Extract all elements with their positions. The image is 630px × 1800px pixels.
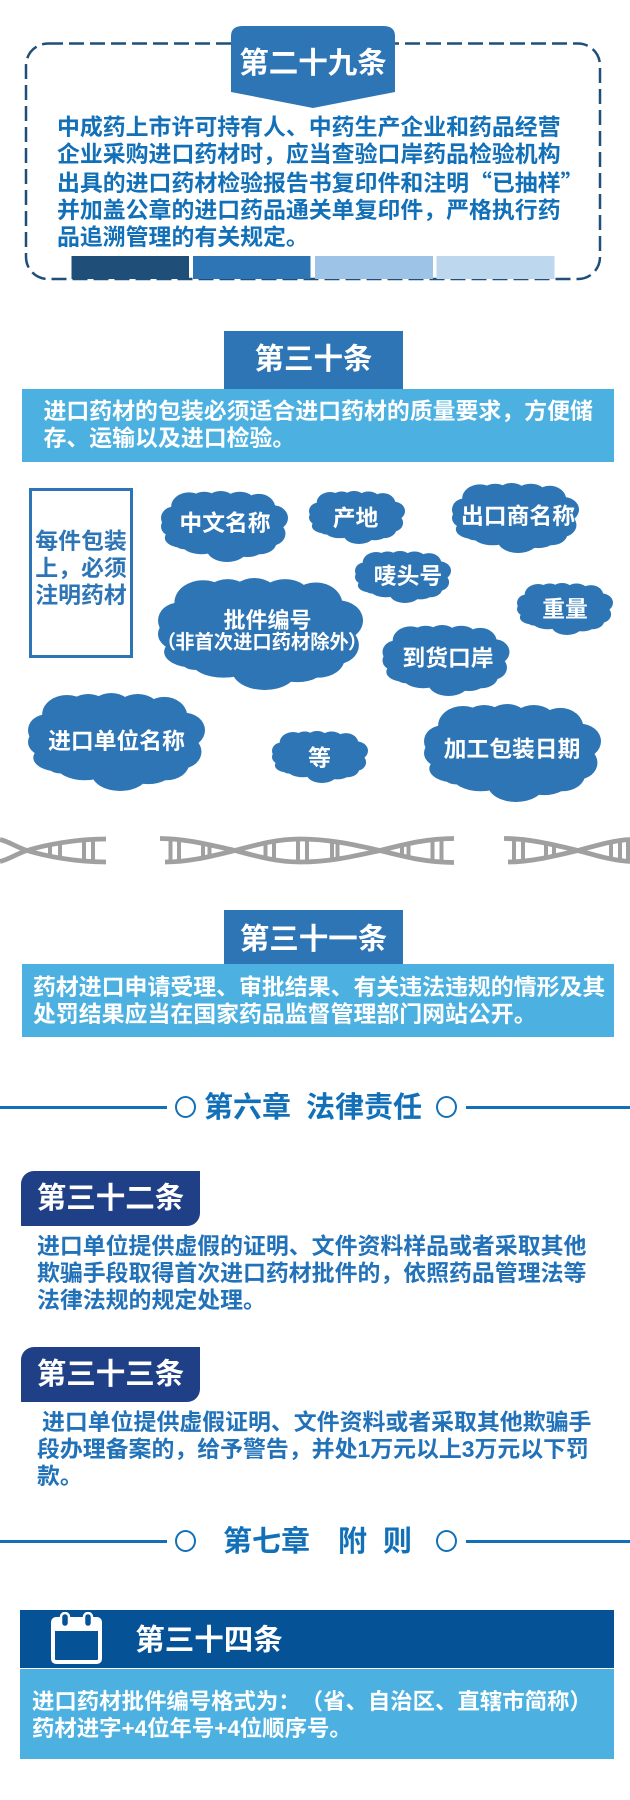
text block: article 29 body: 并加盖公章的进口药品通关单复印件，严格执行药: [57, 197, 561, 223]
cloud: processing and packing date: [424, 704, 601, 802]
cloud: etc: [272, 731, 368, 783]
cloud: shipping mark: 唛头号: [374, 563, 442, 589]
DNA: middle: [160, 838, 454, 862]
cloud: arrival port: [382, 625, 510, 696]
text block: article 31 body: 药材进口申请受理、审批结果、有关违法违规的情形及其: [33, 974, 605, 1000]
text block: article 32 body: 进口单位提供虚假的证明、文件资料样品或者采取其他: [37, 1233, 586, 1259]
cloud: arrival port: 到货口岸: [402, 645, 494, 671]
panel: article 34 header: [20, 1610, 614, 1668]
text block: article 30 body: 进口药材的包装必须适合进口药材的质量要求，方便储: [44, 398, 593, 424]
cloud: importer name: 进口单位名称: [48, 728, 185, 754]
panel: label box: [29, 488, 133, 658]
heading: article 31: [224, 910, 403, 964]
cloud: exporter name: 出口商名称: [461, 503, 575, 529]
cloud: origin: 产地: [333, 505, 378, 531]
text block: article 31 body: [22, 964, 614, 1037]
text block: article 34 body: 进口药材批件编号格式为：（省、自治区、直辖市简称）: [32, 1689, 592, 1714]
divider: chapter 6: [0, 1092, 630, 1124]
text block: article 29 body: [57, 114, 583, 250]
text block: article 34 body: [20, 1669, 614, 1759]
heading: article 30: [224, 331, 403, 389]
DNA: right: [504, 838, 630, 862]
cloud: processing and packing date: 加工包装日期: [444, 736, 580, 762]
cloud: batch number: [158, 578, 363, 690]
DNA: left: [0, 839, 106, 862]
heading: chapter 6: 第六章: [204, 1092, 291, 1124]
text block: article 29 body: 出具的进口药材检验报告书复印件和注明“已抽样”: [57, 164, 583, 198]
panel: label box: 每件包装: [35, 528, 127, 554]
cloud: origin: [309, 491, 405, 544]
text block: article 30 body: 存、运输以及进口检验。: [44, 425, 295, 451]
cloud: importer name: [28, 693, 205, 791]
heading: article 31: 第三十一条: [240, 923, 387, 956]
heading: article 29: 第二十九条: [239, 46, 387, 80]
heading: article 30: 第三十条: [254, 343, 372, 376]
text block: article 32 body: [37, 1233, 586, 1313]
text block: article 34 body: 药材进字+4位年号+4位顺序号。: [32, 1716, 352, 1741]
divider: chapter 7: 附: [338, 1526, 367, 1558]
text block: article 33 body: 进口单位提供虚假证明、文件资料或者采取其他欺骗手: [42, 1409, 591, 1435]
text block: article 31 body: 处罚结果应当在国家药品监督管理部门网站公开。: [33, 1001, 537, 1027]
divider: chapter 7: 则: [383, 1526, 412, 1558]
panel: label box: 注明药材: [35, 582, 127, 608]
heading: article 32: [21, 1171, 200, 1226]
cloud: etc: 等: [308, 745, 331, 771]
divider: chapter 7: [0, 1526, 630, 1558]
text block: article 33 body: [37, 1409, 591, 1489]
heading: chapter 7: 第七章: [223, 1526, 310, 1558]
heading: article 33: 第三十三条: [37, 1358, 184, 1391]
text block: article 32 body: 欺骗手段取得首次进口药材批件的，依照药品管理法等: [37, 1260, 586, 1286]
panel: label box: 上，必须: [35, 554, 127, 580]
decorative DNA strands: [0, 836, 630, 865]
cloud: batch number: 批件编号: [223, 608, 312, 633]
cloud: weight: [517, 583, 613, 635]
cloud: weight: 重量: [542, 596, 588, 622]
text block: article 30 body: [22, 389, 614, 462]
text block: article 32 body: 法律法规的规定处理。: [37, 1287, 266, 1313]
text block: article 29 body: 品追溯管理的有关规定。: [57, 224, 309, 250]
text block: article 29 body: 企业采购进口药材时，应当查验口岸药品检验机构: [57, 141, 561, 167]
cloud: shipping mark: [355, 551, 451, 603]
cloud: Chinese name: [161, 491, 288, 562]
icon: calendar: [51, 1612, 102, 1664]
text block: article 33 body: 段办理备案的，给予警告，并处1万元以上3万元以下罚: [37, 1436, 589, 1462]
text block: article 33 body: 款。: [37, 1463, 83, 1489]
heading: article 34: 第三十四条: [135, 1624, 283, 1656]
cloud: Chinese name: 中文名称: [179, 510, 271, 536]
heading: article 33: [21, 1347, 200, 1402]
cloud: exporter name: [452, 483, 579, 553]
text block: article 29 body: 中成药上市许可持有人、中药生产企业和药品经营: [57, 114, 561, 140]
cloud: batch number: （非首次进口药材除外）: [166, 630, 358, 654]
clouds chart: [28, 483, 613, 802]
divider: chapter 6: 法律责任: [306, 1092, 422, 1124]
heading: article 32: 第三十二条: [37, 1182, 184, 1215]
panel: article 29 dashed frame: [24, 26, 602, 280]
